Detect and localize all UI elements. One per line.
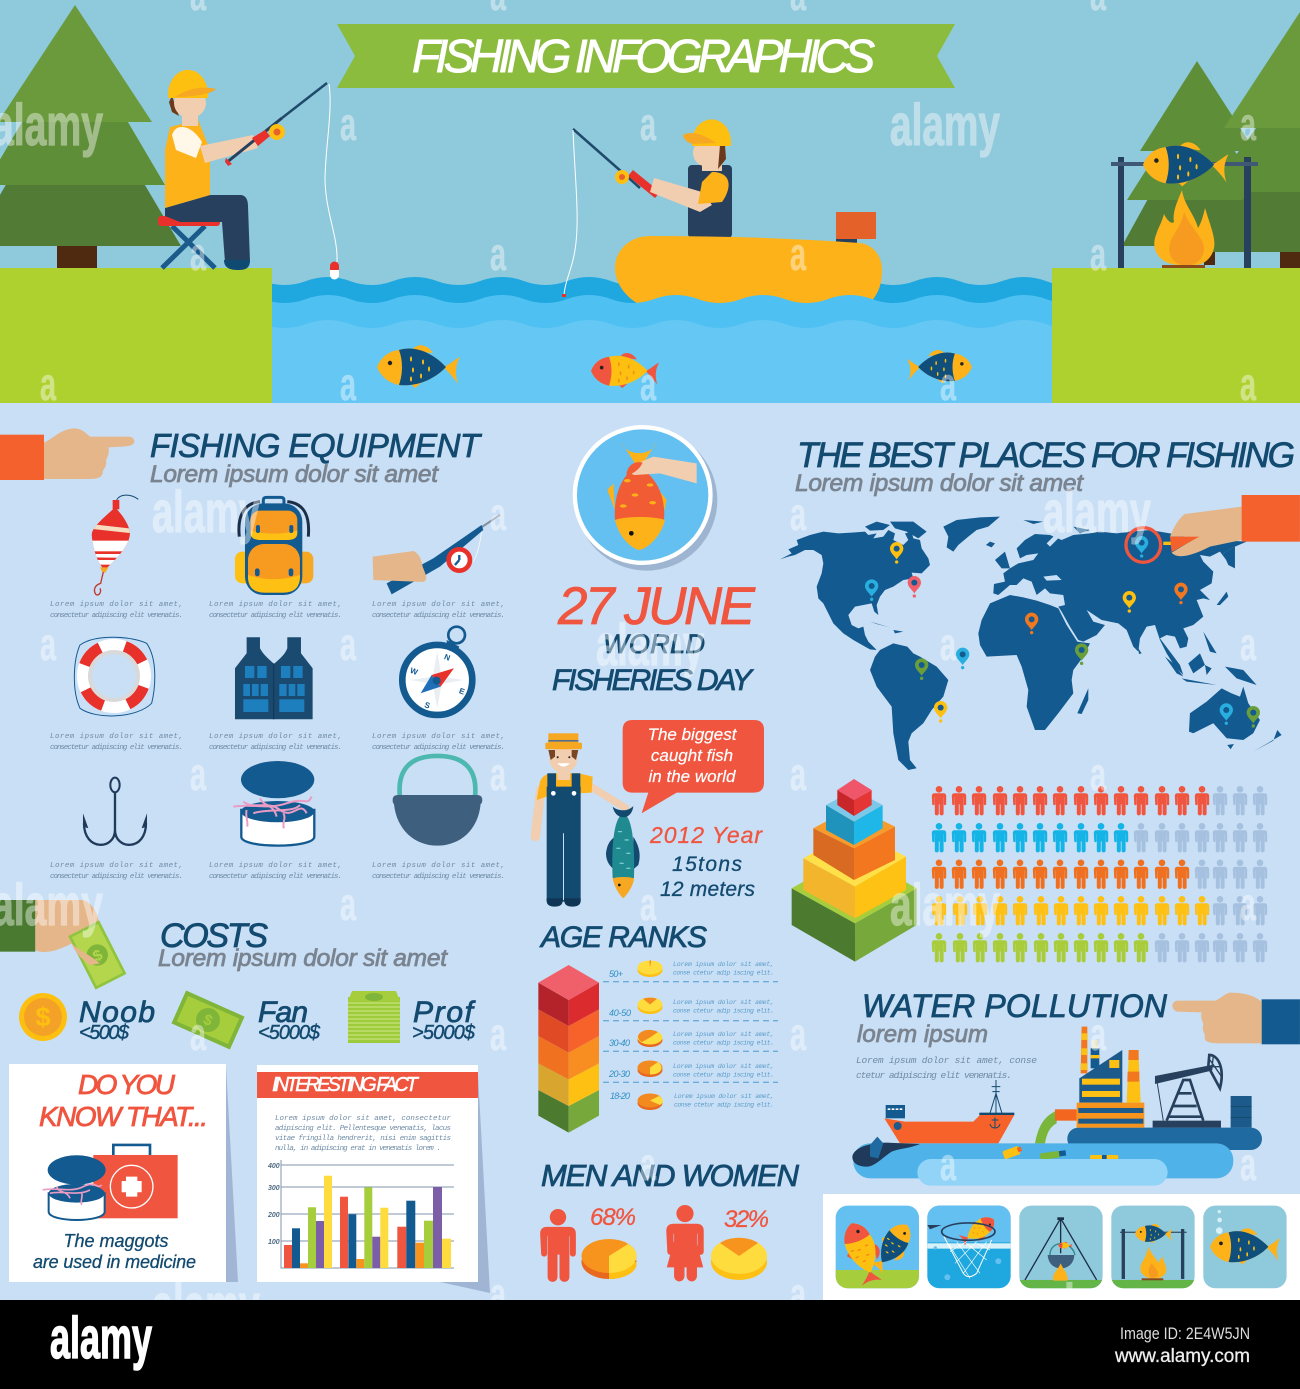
- bar chart: 200: [267, 1212, 280, 1219]
- men statistic: [540, 1204, 636, 1282]
- small alamy watermark letters: a: [340, 878, 356, 930]
- small alamy watermark letters: a: [1090, 228, 1106, 280]
- hand pointing at fishing equipment: [0, 428, 134, 480]
- age labels: 50+: [609, 969, 623, 979]
- seated fisherman on stool: [158, 70, 327, 270]
- isometric age column: [538, 965, 599, 1133]
- centre column illustrations: [535, 425, 764, 907]
- small alamy watermark letters: a: [940, 1138, 956, 1190]
- badge: hand holding fish: [573, 425, 717, 571]
- heading: water pollution: lorem ipsum: [857, 1021, 988, 1048]
- equipment captions row 2: consectetur adipiscing elit venenatis.: [372, 744, 505, 752]
- equipment captions row 3: consectetur adipiscing elit venenatis.: [372, 873, 505, 881]
- date heading: 27 June: 27 JUNE: [557, 577, 756, 636]
- small alamy watermark letters: a: [1240, 878, 1256, 930]
- eastern hemisphere landmasses: [993, 520, 1260, 740]
- icon: life ring: [74, 637, 155, 716]
- icon tiles: [836, 1206, 1287, 1290]
- factory: [1055, 1027, 1144, 1128]
- inland seas: [1043, 535, 1062, 581]
- paragraph: Lorem ipsum dolor sit amet, consectetur: [275, 1115, 451, 1123]
- heading: best places for fishing: [795, 436, 1295, 497]
- heading: fishing equipment: FISHING EQUIPMENT: [150, 427, 483, 464]
- landmasses: [780, 517, 1282, 770]
- age descriptions: Lorem ipsum dolor sit amet,: [673, 961, 774, 968]
- bar chart: [267, 1160, 454, 1268]
- icon: bait can with maggots: [233, 761, 314, 846]
- small alamy watermark letters: a: [640, 1138, 656, 1190]
- age labels: 20-30: [608, 1069, 630, 1079]
- icon: compass: W: [409, 666, 419, 677]
- panel: interesting fact: INTERESTING FACT: [272, 1074, 420, 1096]
- icon: fish pot: [393, 756, 482, 846]
- equipment captions row 2: Lorem ipsum dolor sit amet,: [209, 733, 342, 741]
- stock photo footer: alamy: [50, 1306, 152, 1371]
- bar chart: 100: [268, 1239, 280, 1246]
- equipment captions row 3: consectetur adipiscing elit venenatis.: [209, 873, 342, 881]
- farmer with giant fish: [535, 733, 640, 907]
- speech bubble text: [648, 725, 738, 786]
- people chart row 5: green: [932, 933, 1267, 962]
- icon: first aid kit and bait can: [43, 1145, 178, 1220]
- small alamy watermark letters: a: [940, 618, 956, 670]
- age rank rows: [603, 960, 778, 1110]
- cost tier: noob: <500$: [79, 1022, 130, 1044]
- small alamy watermark letters: a: [640, 358, 656, 410]
- people chart row 3: orange: [932, 860, 1267, 889]
- water pollution text: [856, 1055, 1037, 1081]
- water: back wave: [263, 277, 1089, 320]
- panel: do you know that: [9, 1064, 238, 1282]
- small alamy watermark letters: a: [490, 488, 506, 540]
- equipment captions row 1: [50, 601, 505, 620]
- equipment captions row 1: consectetur adipiscing elit venenatis.: [50, 612, 183, 620]
- panel: do you know that: The maggots: [63, 1231, 169, 1251]
- age labels: 30-40: [609, 1038, 630, 1048]
- speech bubble text: caught fish: [651, 746, 733, 765]
- ship: [884, 1080, 1014, 1143]
- icon strip background: [823, 1194, 1300, 1300]
- equipment captions row 1: consectetur adipiscing elit venenatis.: [372, 612, 505, 620]
- inflatable boat with fisherman: [562, 119, 882, 305]
- world map with location pins: [780, 495, 1300, 770]
- water pollution scene: [852, 993, 1300, 1186]
- tile: two fish: [836, 1206, 919, 1290]
- women statistic: 32%: [724, 1206, 769, 1233]
- paragraph: adipiscing elit. Pellentesque venenatis, lacus: [275, 1125, 451, 1133]
- hand pointing left: [1172, 993, 1300, 1044]
- age descriptions: conse ctetur adip iscing elit.: [673, 1072, 774, 1078]
- speech bubble: [623, 720, 764, 813]
- paragraph: [275, 1115, 451, 1153]
- people chart row 1: red: [932, 786, 1267, 815]
- heading: best places for fishing: THE BEST PLACES FOR FISHING: [797, 436, 1295, 475]
- small alamy watermark letters: a: [790, 1008, 806, 1060]
- cost tier: prof: [348, 991, 476, 1044]
- title banner: [337, 24, 955, 88]
- equipment captions row 1: consectetur adipiscing elit venenatis.: [209, 612, 342, 620]
- equipment captions row 2: [50, 733, 505, 752]
- equipment captions row 2: Lorem ipsum dolor sit amet,: [50, 733, 183, 741]
- cost tier: fan: $: [201, 1011, 216, 1030]
- water pollution text: ctetur adipiscing elit venenatis.: [856, 1070, 1012, 1081]
- heading: fishing equipment: Lorem ipsum dolor sit amet: [150, 461, 439, 488]
- large alamy watermarks: alamy: [1043, 1273, 1151, 1338]
- left pine tree: [0, 5, 181, 268]
- equipment captions row 3: Lorem ipsum dolor sit amet,: [209, 862, 342, 870]
- heading: best places for fishing: Lorem ipsum dolor sit amet: [795, 470, 1084, 497]
- tile: fish in landing net: [927, 1206, 1011, 1288]
- icon: compass: [402, 627, 472, 715]
- icon: backpack: [235, 497, 313, 595]
- small alamy watermark letters: a: [1240, 1138, 1256, 1190]
- title banner: FISHING INFOGRAPHICS: [412, 30, 875, 82]
- tile: fish over campfire: [1111, 1206, 1195, 1290]
- equipment captions row 2: consectetur adipiscing elit venenatis.: [50, 744, 183, 752]
- equipment captions row 2: Lorem ipsum dolor sit amet,: [372, 733, 505, 741]
- small alamy watermark letters: a: [790, 488, 806, 540]
- campfire with fish on a spit: [1111, 142, 1258, 268]
- equipment icons: [74, 495, 500, 846]
- equipment captions row 3: Lorem ipsum dolor sit amet,: [372, 862, 505, 870]
- small alamy watermark letters: a: [190, 748, 206, 800]
- oil rig platform: [1067, 1128, 1262, 1150]
- small alamy watermark letters: a: [190, 1008, 206, 1060]
- water: front waves: [263, 295, 1089, 403]
- stock photo footer: Image ID: 2E4W5JN: [1120, 1324, 1250, 1343]
- icon: compass: N: [443, 652, 452, 663]
- small alamy watermark letters: a: [40, 618, 56, 670]
- event name: World Fisheries Day: [552, 629, 754, 697]
- pollution pipe: [1035, 1111, 1057, 1143]
- small alamy watermark letters: a: [640, 878, 656, 930]
- people chart row 2: blue: [932, 823, 1267, 852]
- biggest fish facts: 12 meters: [660, 878, 756, 901]
- event name: World Fisheries Day: FISHERIES DAY: [552, 664, 754, 697]
- small alamy watermark letters: a: [790, 1268, 806, 1320]
- tile: pot on tripod: [1019, 1206, 1103, 1290]
- cost tier: prof: Prof: [413, 996, 476, 1029]
- bar chart: 400: [267, 1163, 280, 1170]
- paragraph: vitae fringilla hendrerit, nisi enim sagittis: [275, 1135, 451, 1143]
- heading: fishing equipment: [150, 427, 483, 488]
- icon: life vest: [235, 637, 313, 719]
- large alamy watermarks: alamy: [596, 613, 704, 678]
- age labels: [608, 969, 631, 1101]
- age descriptions: Lorem ipsum dolor sit amet,: [673, 1063, 774, 1070]
- oil barrel: [1231, 1096, 1252, 1128]
- grass bank right: [1052, 268, 1300, 403]
- fish: blue and orange: [377, 345, 460, 388]
- icon: compass: S: [423, 700, 432, 711]
- equipment captions row 1: Lorem ipsum dolor sit amet,: [50, 601, 183, 609]
- heading: men and women: MEN AND WOMEN: [541, 1158, 800, 1193]
- small alamy watermark letters: a: [790, 748, 806, 800]
- people chart row 4: yellow: [932, 896, 1267, 925]
- heading: water pollution: [857, 988, 1168, 1048]
- equipment captions row 1: Lorem ipsum dolor sit amet,: [209, 601, 342, 609]
- small alamy watermark letters: a: [1240, 358, 1256, 410]
- stock photo footer: www.alamy.com: [1114, 1346, 1250, 1367]
- heading: costs: COSTS: [160, 917, 268, 955]
- biggest fish facts: 2012 Year: [649, 822, 763, 848]
- equipment captions row 2: consectetur adipiscing elit venenatis.: [209, 744, 342, 752]
- cost tier: noob: Noob: [79, 996, 155, 1029]
- age descriptions: [673, 961, 774, 1108]
- small alamy watermark letters: a: [790, 228, 806, 280]
- stock photo footer: [0, 1300, 1300, 1389]
- large alamy watermarks: alamy: [890, 93, 1000, 158]
- small alamy watermark letters: a: [340, 358, 356, 410]
- oil pump jack: [1153, 1055, 1222, 1128]
- small alamy watermark letters: a: [640, 98, 656, 150]
- age pies: [638, 960, 663, 1110]
- speech bubble text: in the world: [649, 767, 736, 786]
- icon: hand holding fishing rod: [373, 515, 500, 594]
- small alamy watermark letters: a: [340, 98, 356, 150]
- small alamy watermark letters: a: [340, 618, 356, 670]
- age descriptions: Lorem ipsum dolor sit amet,: [673, 999, 774, 1006]
- age descriptions: Lorem ipsum dolor sit amet,: [673, 1031, 774, 1038]
- small alamy watermark letters: a: [190, 228, 206, 280]
- fish: blue facing right: [907, 350, 972, 383]
- cost tier: fan: [171, 991, 321, 1049]
- infographic panel background: [0, 402, 1300, 1300]
- age descriptions: conse ctetur adip iscing elit.: [673, 1008, 774, 1014]
- water pollution text: Lorem ipsum dolor sit amet, conse: [856, 1055, 1037, 1066]
- icon: compass: E: [458, 686, 467, 697]
- fish: red and yellow: [591, 353, 659, 388]
- small alamy watermark letters: a: [40, 358, 56, 410]
- event name: World Fisheries Day: WORLD: [603, 629, 705, 659]
- isometric pyramid: [792, 779, 917, 962]
- grass bank left: [0, 268, 272, 403]
- fishing line and bobber: [325, 84, 339, 280]
- large alamy watermarks: alamy: [1043, 480, 1151, 545]
- speech bubble text: The biggest: [648, 725, 738, 744]
- equipment captions row 1: Lorem ipsum dolor sit amet,: [372, 601, 505, 609]
- small alamy watermark letters: a: [1090, 748, 1106, 800]
- polluted water: [852, 1137, 1233, 1186]
- hand with magnifying glass: [1126, 495, 1300, 562]
- biggest fish facts: 15tons: [672, 853, 742, 876]
- location pins: [865, 542, 1260, 728]
- small alamy watermark letters: a: [490, 748, 506, 800]
- tile: swimming fish: [1203, 1206, 1287, 1288]
- icon: treble hook: [83, 778, 147, 845]
- equipment captions row 3: consectetur adipiscing elit venenatis.: [50, 873, 183, 881]
- cost tier: fan: <5000$: [258, 1022, 321, 1044]
- right pine trees: [1122, 12, 1300, 268]
- small alamy watermark letters: a: [490, 228, 506, 280]
- panel: do you know that: KNOW THAT...: [39, 1101, 208, 1132]
- age descriptions: conse ctetur adip iscing elit.: [673, 1040, 774, 1046]
- hand holding banknote: $: [90, 946, 106, 966]
- small alamy watermark letters: a: [490, 1008, 506, 1060]
- men statistic: 68%: [590, 1204, 636, 1231]
- large alamy watermarks: alamy: [152, 480, 260, 545]
- sky background: [0, 0, 1300, 403]
- age descriptions: conse ctetur adip iscing elit.: [673, 970, 774, 976]
- cost tier: prof: >5000$: [412, 1022, 476, 1044]
- small alamy watermark letters: a: [490, 1268, 506, 1320]
- age labels: 18-20: [610, 1091, 630, 1101]
- small alamy watermark letters: a: [1090, 1008, 1106, 1060]
- large alamy watermarks: alamy: [152, 1273, 260, 1338]
- cost tier: noob: $: [35, 1002, 51, 1032]
- equipment captions row 3: Lorem ipsum dolor sit amet,: [50, 862, 183, 870]
- panel: do you know that: are used in medicine: [33, 1252, 196, 1272]
- small alamy watermark letters: a: [1240, 618, 1256, 670]
- icon: fishing float: [90, 495, 138, 595]
- bar chart: 300: [268, 1185, 280, 1192]
- large alamy watermarks: [0, 93, 1151, 1338]
- equipment captions row 3: [50, 862, 505, 881]
- heading: water pollution: WATER POLLUTION: [862, 988, 1168, 1024]
- panel: interesting fact: [257, 1065, 490, 1293]
- cost tier: fan: Fan: [258, 996, 308, 1029]
- small alamy watermark letters: a: [940, 358, 956, 410]
- heading: costs: Lorem ipsum dolor sit amet: [158, 945, 448, 972]
- cost tier: noob: [19, 993, 155, 1044]
- biggest fish facts: [649, 822, 763, 901]
- heading: age ranks: AGE RANKS: [539, 921, 707, 954]
- large alamy watermarks: alamy: [890, 873, 1000, 938]
- small alamy watermark letters: a: [1240, 98, 1256, 150]
- age descriptions: conse ctetur adip iscing elit.: [674, 1102, 774, 1108]
- hand holding banknote: [0, 900, 126, 990]
- heading: costs: [158, 917, 448, 972]
- age labels: 40-50: [609, 1008, 631, 1018]
- panel: do you know that: DO YOU: [78, 1069, 176, 1100]
- women statistic: [666, 1205, 769, 1281]
- age descriptions: Lorem ipsum dolor sit amet,: [674, 1093, 774, 1100]
- paragraph: nulla, in adipiscing erat in venenatis lorem .: [275, 1145, 441, 1153]
